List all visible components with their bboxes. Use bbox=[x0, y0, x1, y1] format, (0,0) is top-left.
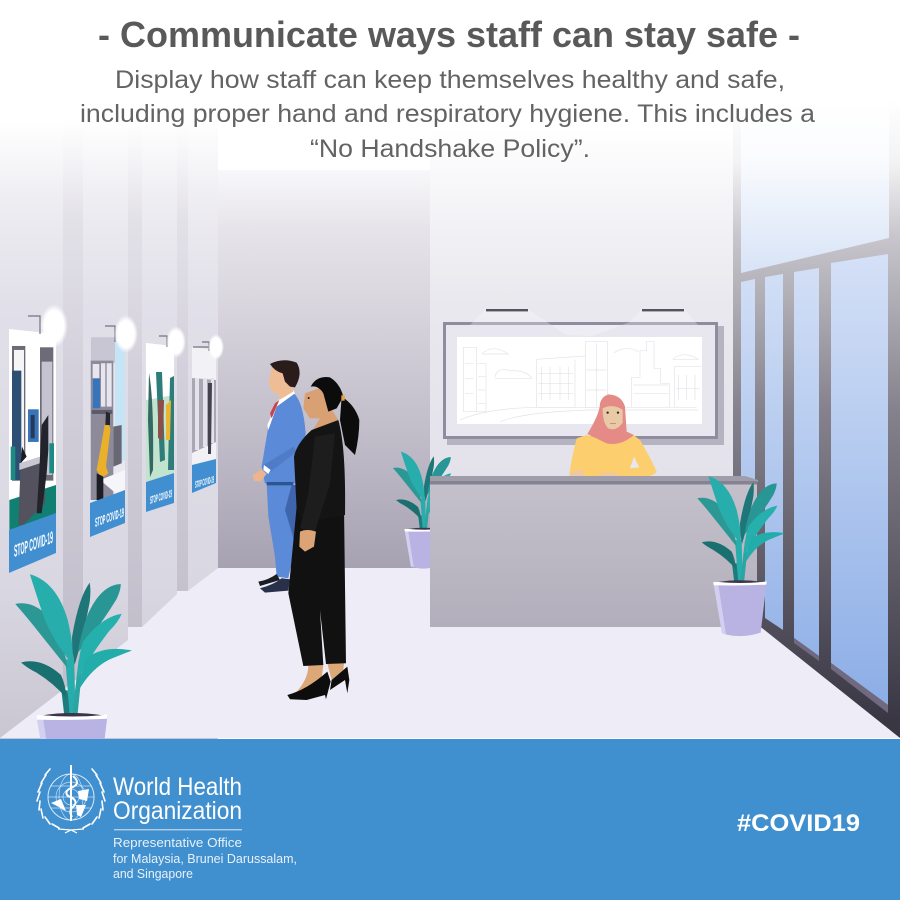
WHO wordmark: and Singapore bbox=[113, 867, 193, 881]
WHO wordmark: for Malaysia, Brunei Darussalam, bbox=[113, 852, 297, 866]
floor bbox=[0, 568, 900, 738]
window panes bbox=[741, 254, 888, 705]
poster 2: STOP COVID-19 bbox=[95, 506, 124, 531]
WHO wordmark: Representative Office bbox=[113, 836, 242, 850]
lamps over posters bbox=[28, 304, 224, 360]
framed wall picture bbox=[443, 309, 724, 445]
back wall of corridor bbox=[216, 170, 430, 570]
plant behind desk bbox=[393, 452, 457, 569]
poster 4: STOP COVID-19 bbox=[195, 474, 214, 490]
left wall with pillars bbox=[0, 120, 218, 742]
poster 3: STOP COVID-19 bbox=[150, 487, 172, 506]
receptionist bbox=[569, 394, 657, 479]
footer band bbox=[0, 739, 900, 900]
man in blue suit bbox=[253, 360, 306, 593]
laurel bbox=[37, 769, 105, 828]
window wall bbox=[733, 100, 900, 738]
plant right bbox=[697, 476, 785, 636]
description: Display how staff can keep themselves healthy and safe, bbox=[115, 66, 785, 94]
poster 4 bbox=[192, 347, 216, 493]
WHO wordmark bbox=[113, 773, 297, 881]
title: - Communicate ways staff can stay safe - bbox=[98, 14, 800, 55]
hashtag: #COVID19 bbox=[737, 810, 860, 837]
poster 1 bbox=[9, 329, 56, 573]
woman in black suit bbox=[287, 377, 359, 700]
right wall bbox=[430, 130, 740, 490]
description: “No Handshake Policy”. bbox=[310, 135, 590, 163]
poster 1: STOP COVID-19 bbox=[14, 527, 53, 561]
poster 2 bbox=[90, 337, 125, 537]
reception desk bbox=[430, 476, 758, 627]
WHO emblem bbox=[37, 765, 105, 833]
WHO wordmark: Organization bbox=[113, 797, 242, 825]
description: including proper hand and respiratory hygiene. This includes a bbox=[80, 100, 815, 128]
ceiling spot lights bbox=[470, 309, 698, 336]
poster 3 bbox=[146, 343, 174, 512]
city sketch bbox=[460, 342, 702, 422]
WHO wordmark: World Health bbox=[113, 773, 242, 801]
description bbox=[80, 66, 815, 163]
plant left foreground bbox=[15, 574, 132, 787]
upper glass bbox=[741, 100, 889, 273]
